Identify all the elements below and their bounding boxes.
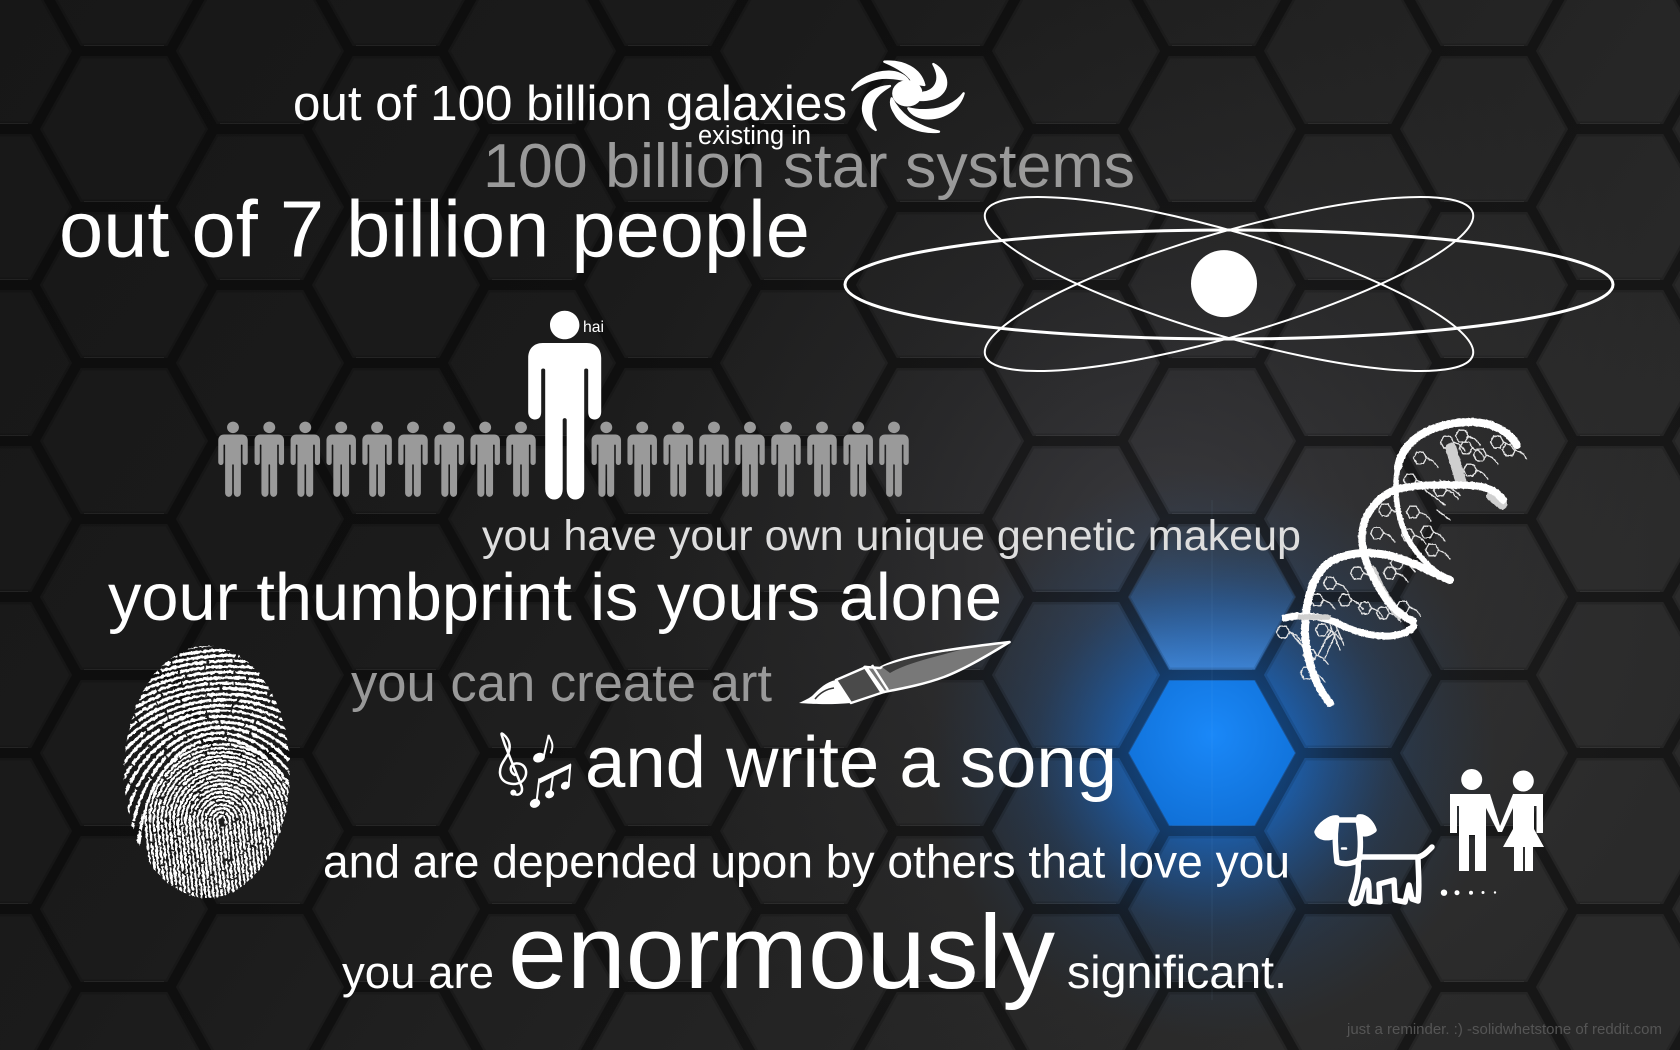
icon: trailing dots (1441, 890, 1496, 896)
text: you have your own unique genetic makeup: you have your own unique genetic makeup (482, 512, 1301, 560)
heading: out of 7 billion people: out of 7 billion people (59, 184, 810, 274)
icon: DNA double helix (1276, 422, 1527, 703)
icon: large white person (528, 311, 601, 500)
icon: dog (1317, 817, 1432, 904)
text: hai: hai (583, 319, 604, 336)
text: you can create art: you can create art (351, 654, 772, 713)
text: and are depended upon by others that love you: and are depended upon by others that love you (323, 836, 1290, 888)
heading: your thumbprint is yours alone: your thumbprint is yours alone (108, 561, 1002, 635)
heading: 100 billion star systems: 100 billion star systems (483, 132, 1135, 201)
icon: paint brush (799, 642, 1010, 704)
text: existing in: existing in (698, 122, 811, 150)
text: you are: you are (342, 947, 494, 998)
icon: star system orbits with sun (845, 163, 1613, 405)
heading: out of 100 billion galaxies: out of 100 billion galaxies (293, 76, 847, 131)
heading: enormously: enormously (508, 894, 1055, 1011)
heading: and write a song: and write a song (585, 722, 1117, 803)
icon: couple holding hands (1450, 769, 1544, 871)
text: significant.: significant. (1067, 946, 1287, 998)
row of grey people (218, 422, 909, 497)
icon: treble clef and music notes (500, 733, 571, 810)
icon: spiral galaxy (852, 62, 964, 132)
icon: fingerprint (123, 646, 290, 899)
footer credit: just a reminder. :) -solidwhetstone of reddit.com (1346, 1021, 1662, 1038)
